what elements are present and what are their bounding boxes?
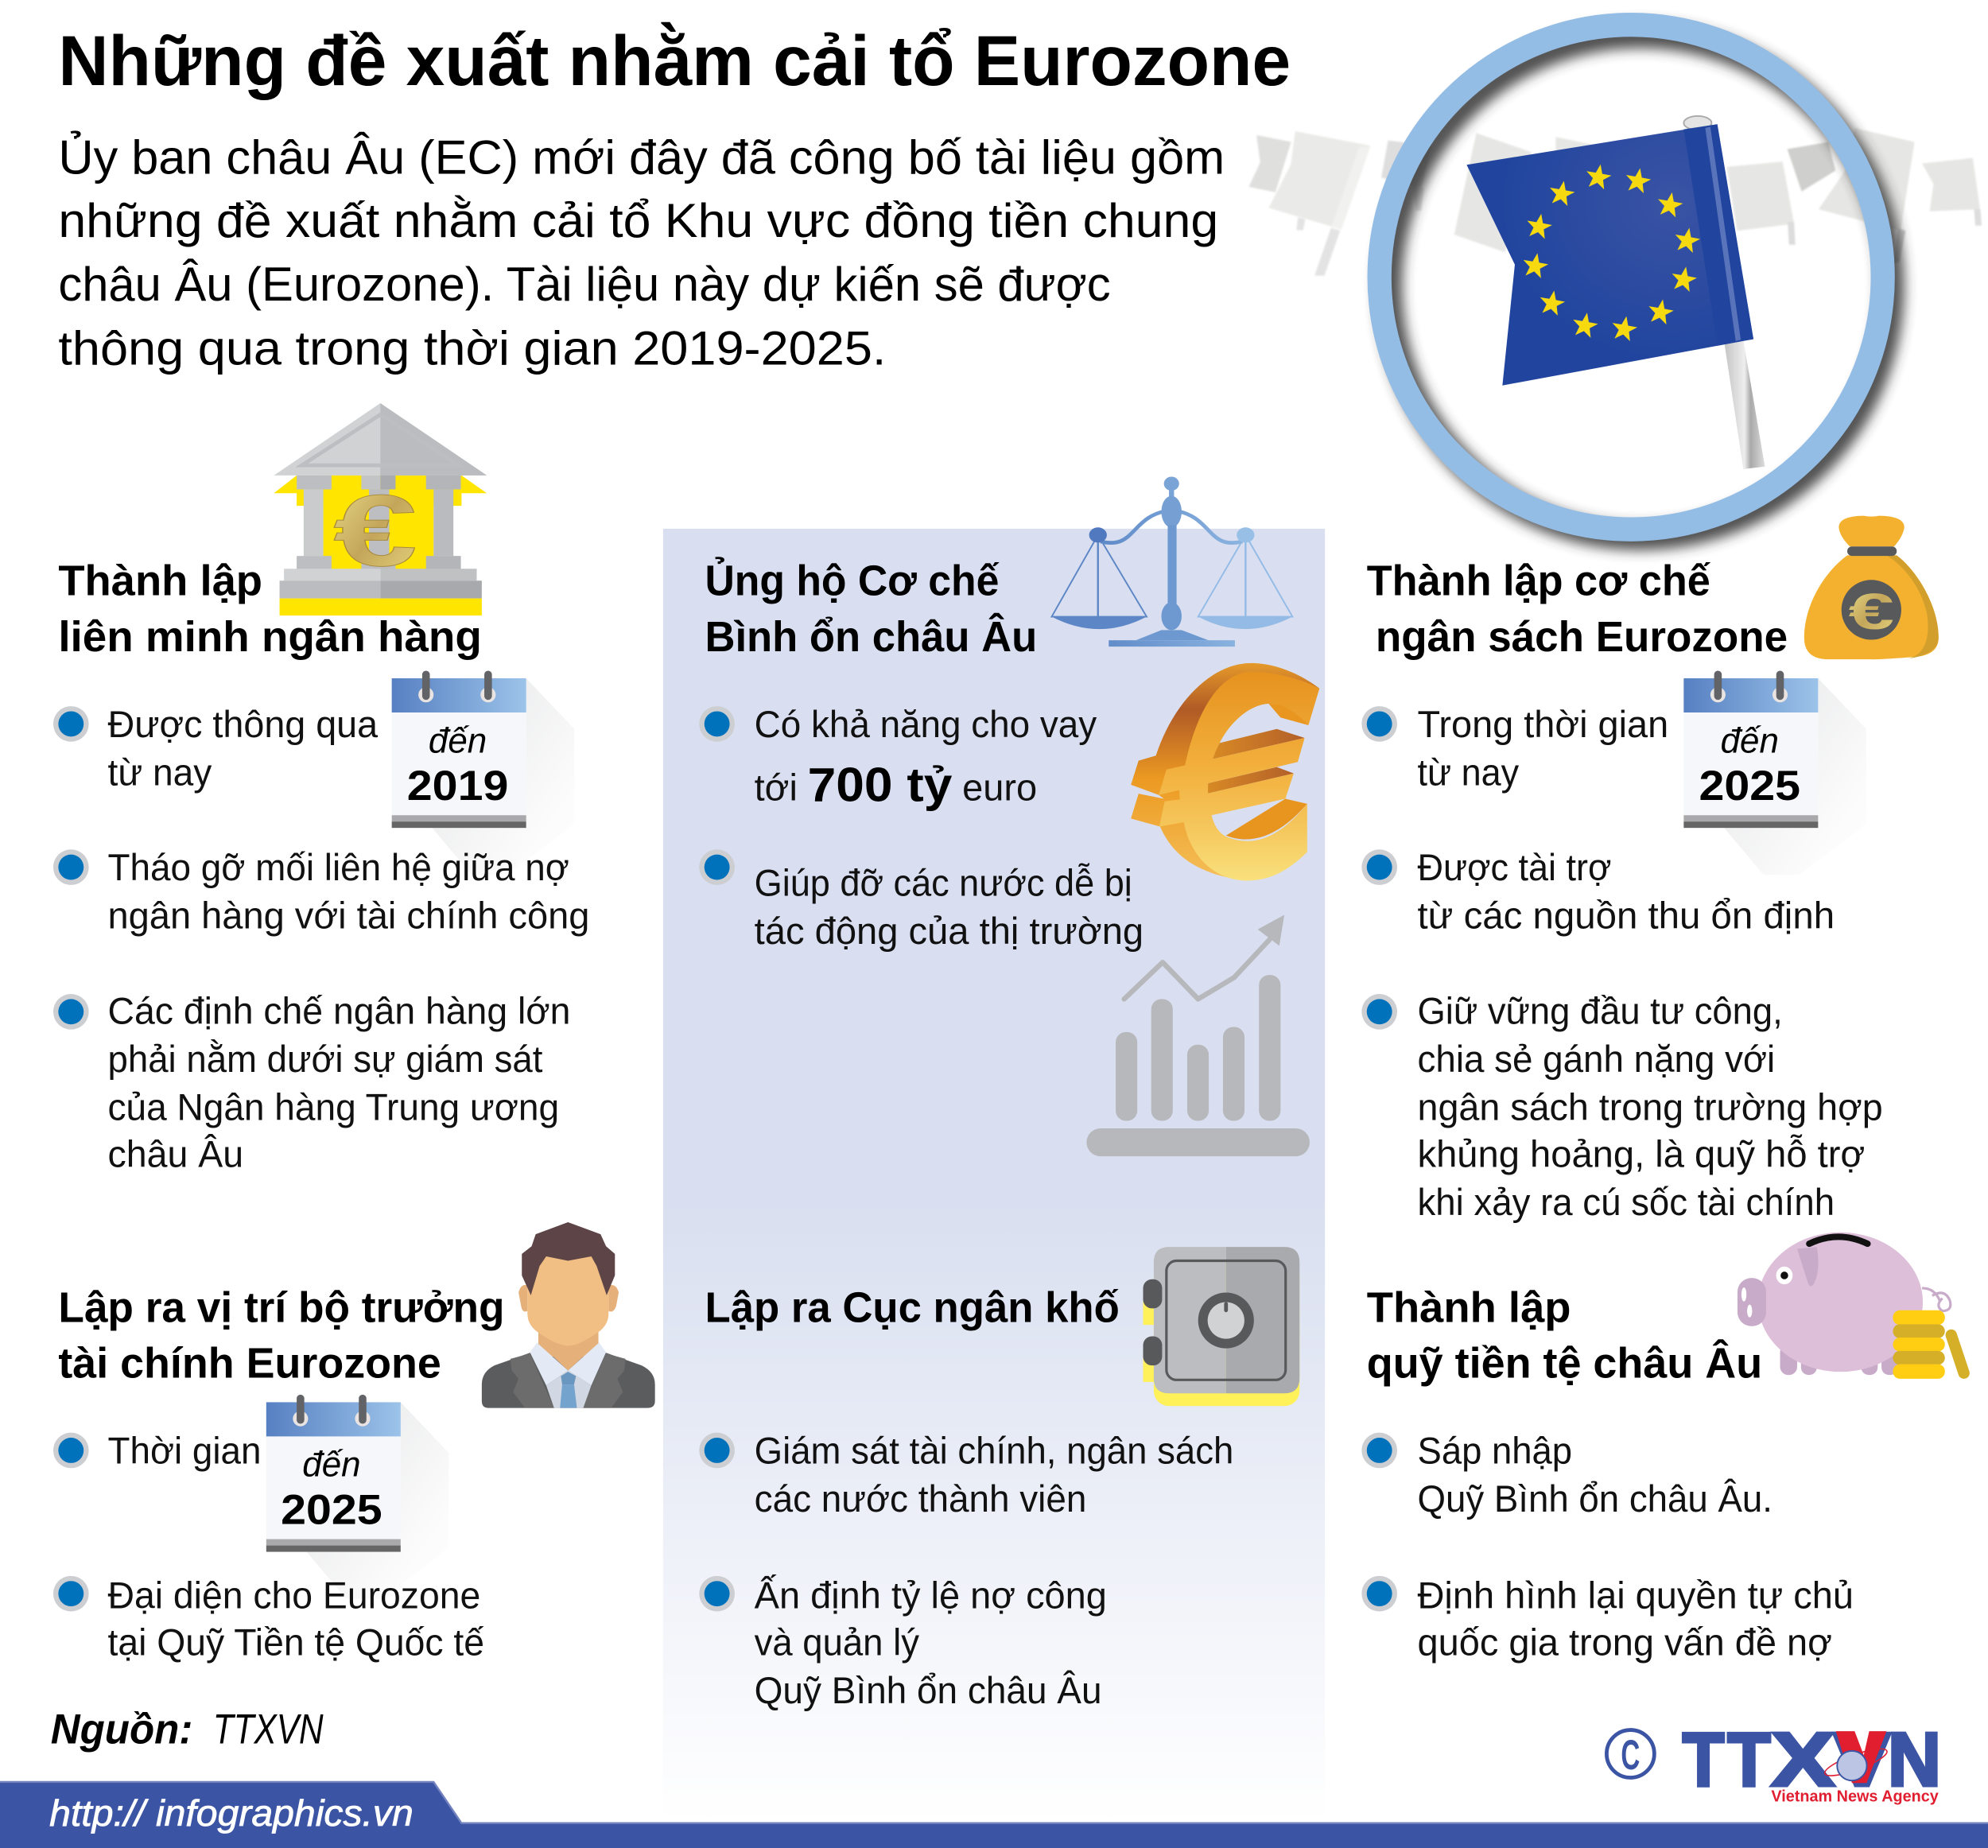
bullet: funded xyxy=(1361,846,1835,937)
bullet: supervise finance xyxy=(699,1430,1233,1520)
bullet: lending 700 billion xyxy=(699,703,1097,812)
icon: calendar 2025 right xyxy=(1683,670,1866,875)
heading: eurozone budget: Thành lập cơ chế xyxy=(1367,557,1711,605)
bullet: help vulnerable countries: Giúp đỡ các nước dễ bị xyxy=(755,861,1132,903)
bullet: period from now: Trong thời gian xyxy=(1418,703,1668,745)
heading: banking union: Thành lập xyxy=(58,557,262,605)
icon: calendar 2019 xyxy=(392,670,574,875)
logo: TTXVN xyxy=(1606,1717,1941,1806)
bullet: merge ESM: Quỹ Bình ổn châu Âu. xyxy=(1418,1477,1773,1520)
icon: money bag xyxy=(1804,516,1939,659)
bullet: supervision: phải nằm dưới sự giám sát xyxy=(108,1038,542,1080)
icon: safe xyxy=(1143,1247,1299,1406)
bullet: funded: Được tài trợ xyxy=(1418,846,1611,888)
intro text: châu Âu (Eurozone). Tài liệu này dự kiến sẽ được xyxy=(58,257,1111,311)
bullet: supervise finance: các nước thành viên xyxy=(755,1477,1086,1520)
bullet: represent at IMF: Đại diện cho Eurozone xyxy=(108,1574,480,1616)
bullet: debt ratio xyxy=(699,1574,1107,1711)
heading: European monetary fund xyxy=(1367,1283,1762,1387)
ring shadow xyxy=(1389,36,1892,538)
icon: calendar 2019: đến xyxy=(429,721,487,760)
bullet: public investment xyxy=(1361,989,1883,1223)
bullet: lending 700 billion: Có khả năng cho vay xyxy=(755,703,1097,745)
logo: TTXVN: Vietnam News Agency xyxy=(1771,1788,1939,1806)
bullet: sovereignty: quốc gia trong vấn đề nợ xyxy=(1418,1621,1832,1663)
icon: money bag: € xyxy=(1849,583,1894,640)
background white flags xyxy=(1248,128,1982,276)
bullet: public investment: khi xảy ra cú sốc tài chính xyxy=(1418,1181,1835,1223)
bullet: supervision: châu Âu xyxy=(108,1132,243,1174)
source line xyxy=(51,1706,324,1753)
panel: centre column xyxy=(663,529,1325,1823)
heading: finance minister xyxy=(58,1283,505,1387)
bullet: lending 700 billion: tới xyxy=(755,767,798,809)
flag stars xyxy=(1520,162,1702,342)
footer band xyxy=(0,1781,1988,1848)
intro text: Ủy ban châu Âu (EC) mới đây đã công bố tài liệu gồm xyxy=(58,130,1225,184)
icon: scales xyxy=(1052,477,1292,646)
bullet: supervise finance: Giám sát tài chính, ngân sách xyxy=(755,1430,1233,1472)
heading: stability mechanism: Ủng hộ Cơ chế xyxy=(705,557,1000,605)
source line: TTXVN xyxy=(213,1706,324,1753)
intro text: thông qua trong thời gian 2019-2025. xyxy=(58,320,886,375)
icon: minister portrait xyxy=(482,1222,655,1408)
bullet: merge ESM xyxy=(1361,1430,1773,1520)
icon: calendar 2025 left xyxy=(266,1395,448,1599)
bullet: debt ratio: Ấn định tỷ lệ nợ công xyxy=(755,1574,1107,1616)
logo: TTXVN: T xyxy=(1683,1717,1724,1802)
source line: Nguồn: xyxy=(51,1706,192,1753)
bullet: sovereignty xyxy=(1361,1574,1854,1663)
heading: stability mechanism xyxy=(705,557,1037,661)
heading: European monetary fund: quỹ tiền tệ châu Âu xyxy=(1367,1338,1762,1387)
bullet: time: Thời gian xyxy=(108,1430,261,1472)
footer url: http:// infographics.vn xyxy=(49,1792,414,1834)
bullet: public investment: khủng hoảng, là quỹ hỗ trợ xyxy=(1418,1132,1865,1174)
icon: 3D euro sign xyxy=(1131,663,1319,880)
heading: eurozone budget xyxy=(1367,557,1788,661)
flag cloth xyxy=(1466,124,1753,386)
logo: TTXVN: X xyxy=(1771,1717,1835,1802)
bullet: public investment: Giữ vững đầu tư công, xyxy=(1418,989,1783,1031)
logo: TTXVN: T xyxy=(1727,1717,1771,1802)
heading: treasury: Lập ra Cục ngân khố xyxy=(705,1283,1120,1331)
bullet: help vulnerable countries: tác động của thị trường xyxy=(755,910,1143,952)
pole knob xyxy=(1683,116,1711,130)
bullet: lending 700 billion: euro xyxy=(962,767,1037,809)
icon: bank xyxy=(274,403,487,615)
bullet: sovereignty: Định hình lại quyền tự chủ xyxy=(1418,1574,1854,1616)
bullet: supervision: của Ngân hàng Trung ương xyxy=(108,1085,559,1128)
icon: calendar 2025 left: đến xyxy=(302,1446,361,1485)
bullet: public investment: chia sẻ gánh nặng với xyxy=(1418,1038,1775,1080)
bullet: untangle debt link: ngân hàng với tài chính công xyxy=(108,895,589,937)
icon: calendar 2025 left: 2025 xyxy=(281,1486,382,1533)
bullet: supervision: Các định chế ngân hàng lớn xyxy=(108,989,570,1031)
heading: banking union xyxy=(58,557,482,661)
pole xyxy=(1724,340,1765,469)
bullet: debt ratio: và quản lý xyxy=(755,1621,919,1663)
heading: European monetary fund: Thành lập xyxy=(1367,1283,1571,1331)
intro text xyxy=(58,130,1225,375)
title: Những đề xuất nhằm cải tổ Eurozone xyxy=(58,21,1291,100)
intro text: những đề xuất nhằm cải tổ Khu vực đồng tiền chung xyxy=(58,193,1218,247)
bullet: adopted from now: từ nay xyxy=(108,751,212,794)
heading: finance minister: tài chính Eurozone xyxy=(58,1339,441,1387)
bullet: adopted from now: Được thông qua xyxy=(108,703,379,745)
heading: stability mechanism: Bình ổn châu Âu xyxy=(705,612,1037,661)
bullet: supervision xyxy=(53,989,570,1174)
bullet: untangle debt link xyxy=(53,846,589,937)
icon: growth chart xyxy=(1086,915,1310,1156)
bullet: adopted from now xyxy=(53,703,379,794)
bullet: period from now: từ nay xyxy=(1418,751,1520,794)
bullet: funded: từ các nguồn thu ổn định xyxy=(1418,895,1835,937)
bullet: public investment: ngân sách trong trường hợp xyxy=(1418,1085,1883,1128)
icon: calendar 2025 right: 2025 xyxy=(1699,763,1800,809)
bullet: help vulnerable countries xyxy=(699,849,1143,952)
heading: banking union: liên minh ngân hàng xyxy=(58,613,482,661)
bullet: period from now xyxy=(1361,703,1668,794)
bullet: lending 700 billion: 700 tỷ xyxy=(808,758,953,812)
icon: piggy bank xyxy=(1738,1233,1964,1379)
illustration: EU flag in ring xyxy=(1248,25,1982,538)
logo: TTXVN: V xyxy=(1833,1717,1890,1802)
heading: eurozone budget: ngân sách Eurozone xyxy=(1376,613,1788,661)
logo: TTXVN: C xyxy=(1621,1732,1640,1779)
ring xyxy=(1380,25,1883,530)
bullet: untangle debt link: Tháo gỡ mối liên hệ giữa nợ xyxy=(108,846,569,888)
bullet: represent at IMF xyxy=(53,1574,484,1663)
bullet: merge ESM: Sáp nhập xyxy=(1418,1430,1572,1472)
icon: calendar 2025 right: đến xyxy=(1721,721,1779,760)
heading: finance minister: Lập ra vị trí bộ trưởng xyxy=(58,1283,505,1331)
logo: TTXVN: N xyxy=(1888,1717,1941,1802)
icon: bank: € xyxy=(333,475,417,588)
bullet: debt ratio: Quỹ Bình ổn châu Âu xyxy=(755,1669,1102,1711)
bullet: represent at IMF: tại Quỹ Tiền tệ Quốc tế xyxy=(108,1621,484,1663)
icon: calendar 2019: 2019 xyxy=(407,763,508,809)
